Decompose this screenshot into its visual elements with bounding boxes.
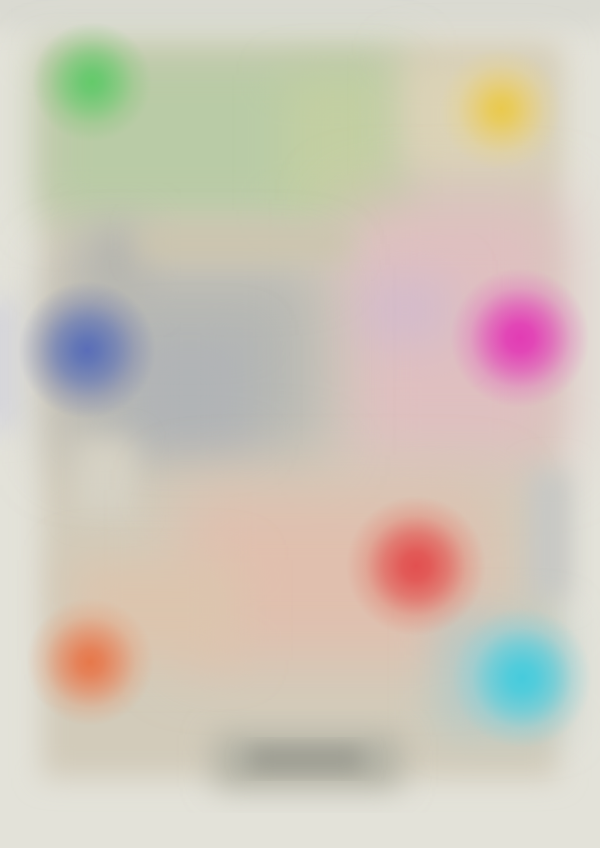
inner panel tint: [42, 46, 558, 778]
top right warm field: [400, 55, 550, 175]
icon: blue circle: [18, 281, 156, 419]
footer box: [204, 724, 410, 802]
grey blue left field: [60, 265, 320, 455]
icon: yellow circle: [440, 48, 562, 170]
green header field: [40, 50, 410, 220]
lower right cool edge: [530, 470, 570, 600]
icon: cyan circle: [452, 608, 592, 748]
icon: magenta circle: [450, 268, 590, 408]
icon: green circle: [32, 22, 152, 142]
middle tan: [140, 225, 350, 260]
icon: red circle: [346, 496, 486, 636]
pink right field: [345, 200, 565, 460]
icon: orange circle: [26, 598, 154, 726]
lower blush field: [180, 490, 490, 660]
